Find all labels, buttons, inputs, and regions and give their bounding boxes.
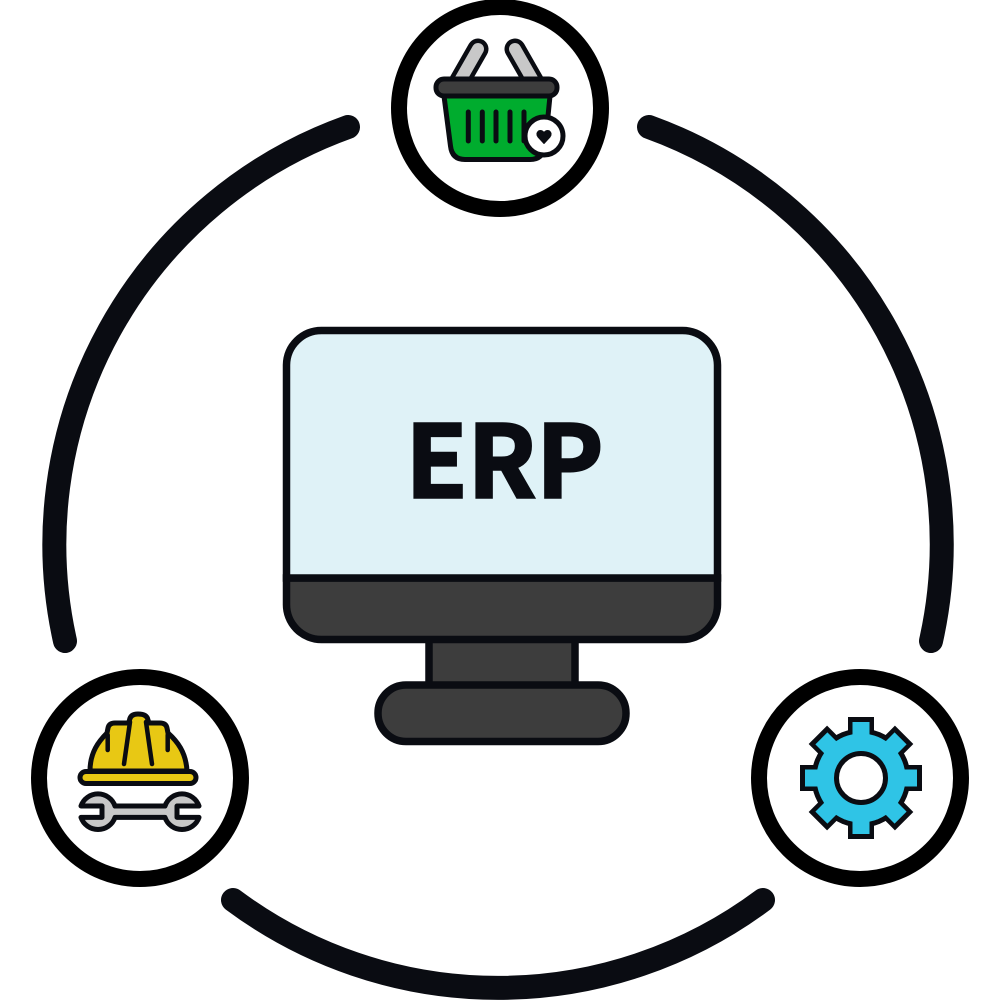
icon: heart bbox=[537, 130, 551, 144]
arc: helmet to basket bbox=[54, 127, 348, 641]
arc: gear to helmet bbox=[233, 900, 763, 988]
monitor bezel bbox=[286, 578, 718, 640]
arc: basket to gear bbox=[649, 127, 942, 641]
cycle ring arcs bbox=[54, 127, 942, 988]
heart badge bbox=[525, 117, 563, 155]
badge: shopping basket bbox=[399, 7, 601, 209]
icon: wrench bbox=[81, 794, 199, 829]
left handle bbox=[458, 49, 478, 84]
badge ring bbox=[759, 677, 961, 879]
helmet ridges bbox=[108, 722, 168, 764]
basket rim bbox=[436, 79, 557, 96]
right handle bbox=[515, 49, 535, 84]
gear fill bbox=[805, 722, 917, 834]
icon: gear bbox=[800, 717, 922, 839]
badge: gear bbox=[759, 677, 961, 879]
helmet dome bbox=[90, 714, 187, 771]
badge ring bbox=[39, 677, 241, 879]
basket body bbox=[444, 96, 550, 160]
monitor base bbox=[378, 685, 626, 742]
badge ring bbox=[399, 7, 601, 209]
monitor neck bbox=[429, 635, 575, 690]
badge: hard hat and wrench bbox=[39, 677, 241, 879]
monitor screen bbox=[286, 330, 718, 578]
basket slats bbox=[468, 112, 524, 141]
icon: hard hat bbox=[80, 714, 196, 784]
helmet brim bbox=[80, 772, 196, 784]
icon: basket bbox=[436, 49, 563, 160]
gear outline bbox=[800, 717, 922, 839]
heading: ERP: ERP bbox=[406, 382, 604, 527]
gear hole bbox=[836, 754, 886, 802]
icon: computer monitor bbox=[286, 330, 718, 742]
